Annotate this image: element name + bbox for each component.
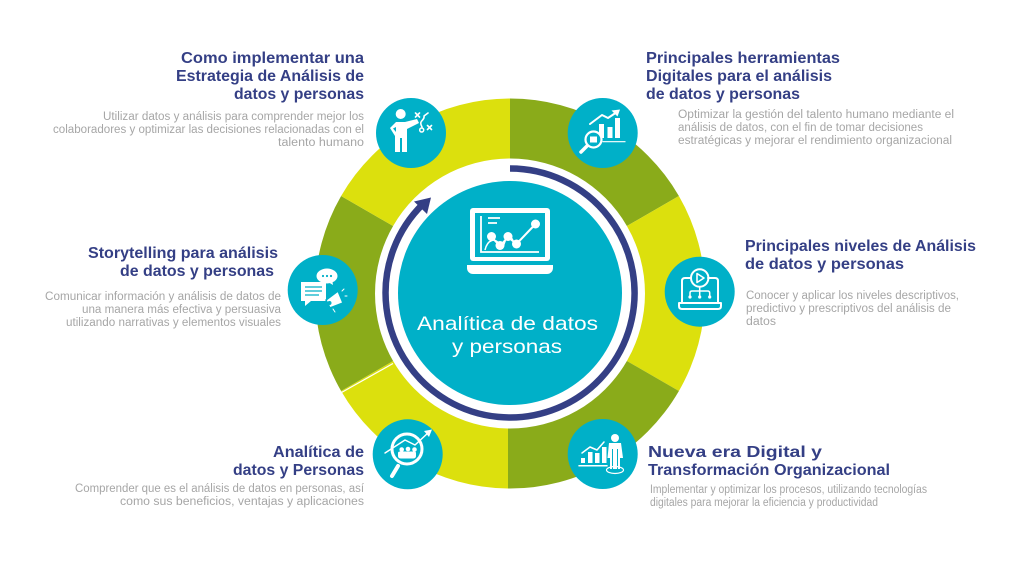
text block: storytelling: Storytelling para análisis: [88, 245, 278, 262]
text block: analítica de datos y personas: datos y Personas: [233, 462, 364, 479]
text block: principales herramientas: Optimizar la gestión del talento humano mediante el: [678, 109, 954, 121]
text block: storytelling: [45, 245, 282, 329]
text block: storytelling: una manera más efectiva y persuasiva: [82, 304, 282, 316]
central circle: [398, 181, 622, 405]
text block: como implementar: Utilizar datos y análisis para comprender mejor los: [103, 111, 364, 123]
text block: principales niveles: predictivo y prescriptivos del análisis de: [746, 303, 951, 315]
text block: storytelling: utilizando narrativas y elementos visuales: [66, 317, 281, 329]
text block: analítica de datos y personas: Analítica de: [273, 444, 364, 461]
circular arrow: [386, 168, 635, 418]
text block: nueva era digital: digitales para mejorar la eficiencia y productividad: [650, 497, 878, 509]
central title: y personas: [452, 336, 562, 358]
icon: transformation chart and person: [568, 419, 638, 489]
icon: digital tools chart and magnifier: [568, 98, 638, 168]
text block: como implementar: colaboradores y optimizar las decisiones relacionadas con el: [53, 124, 364, 136]
text block: principales herramientas: estratégicas y mejorar el rendimiento organizacional: [678, 135, 952, 147]
icon: laptop with chart: [467, 208, 553, 274]
text block: principales niveles: datos: [746, 316, 776, 328]
text block: analítica de datos y personas: [75, 444, 365, 508]
text block: principales herramientas: [646, 50, 954, 147]
central title: Analítica de datos: [417, 313, 598, 335]
text block: nueva era digital: Transformación Organizacional: [648, 462, 890, 479]
text block: como implementar: [53, 50, 364, 149]
text block: principales herramientas: análisis de datos, con el fin de tomar decisiones: [678, 122, 923, 134]
icon: strategy person: [376, 98, 446, 168]
text block: principales niveles: Principales niveles de Análisis: [745, 238, 976, 255]
text block: como implementar: datos y personas: [234, 86, 364, 103]
text block: principales niveles: Conocer y aplicar los niveles descriptivos,: [746, 290, 959, 302]
text block: storytelling: de datos y personas: [120, 263, 274, 280]
text block: como implementar: Como implementar una: [181, 50, 364, 67]
icon: people analytics magnifier: [373, 419, 443, 489]
text block: nueva era digital: Nueva era Digital y: [648, 444, 822, 461]
text block: nueva era digital: Implementar y optimizar los procesos, utilizando tecnologías: [650, 484, 927, 496]
text block: nueva era digital: [648, 444, 927, 509]
segmented ring: [315, 98, 705, 489]
text block: analítica de datos y personas: Comprender que es el análisis de datos en personas, así: [75, 483, 365, 495]
text block: principales herramientas: Digitales para el análisis: [646, 68, 832, 85]
text block: principales niveles: [745, 238, 976, 328]
text block: como implementar: talento humano: [278, 137, 364, 149]
text block: como implementar: Estrategia de Análisis de: [176, 68, 364, 85]
text block: principales herramientas: de datos y personas: [646, 86, 800, 103]
text block: principales niveles: de datos y personas: [745, 256, 904, 273]
text block: analítica de datos y personas: como sus beneficios, ventajas y aplicaciones: [120, 496, 364, 508]
icon: laptop with play button: [665, 257, 735, 327]
icon: storytelling speech bubbles and megaphone: [288, 255, 358, 325]
text block: principales herramientas: Principales herramientas: [646, 50, 840, 67]
text block: storytelling: Comunicar información y análisis de datos de: [45, 291, 281, 303]
